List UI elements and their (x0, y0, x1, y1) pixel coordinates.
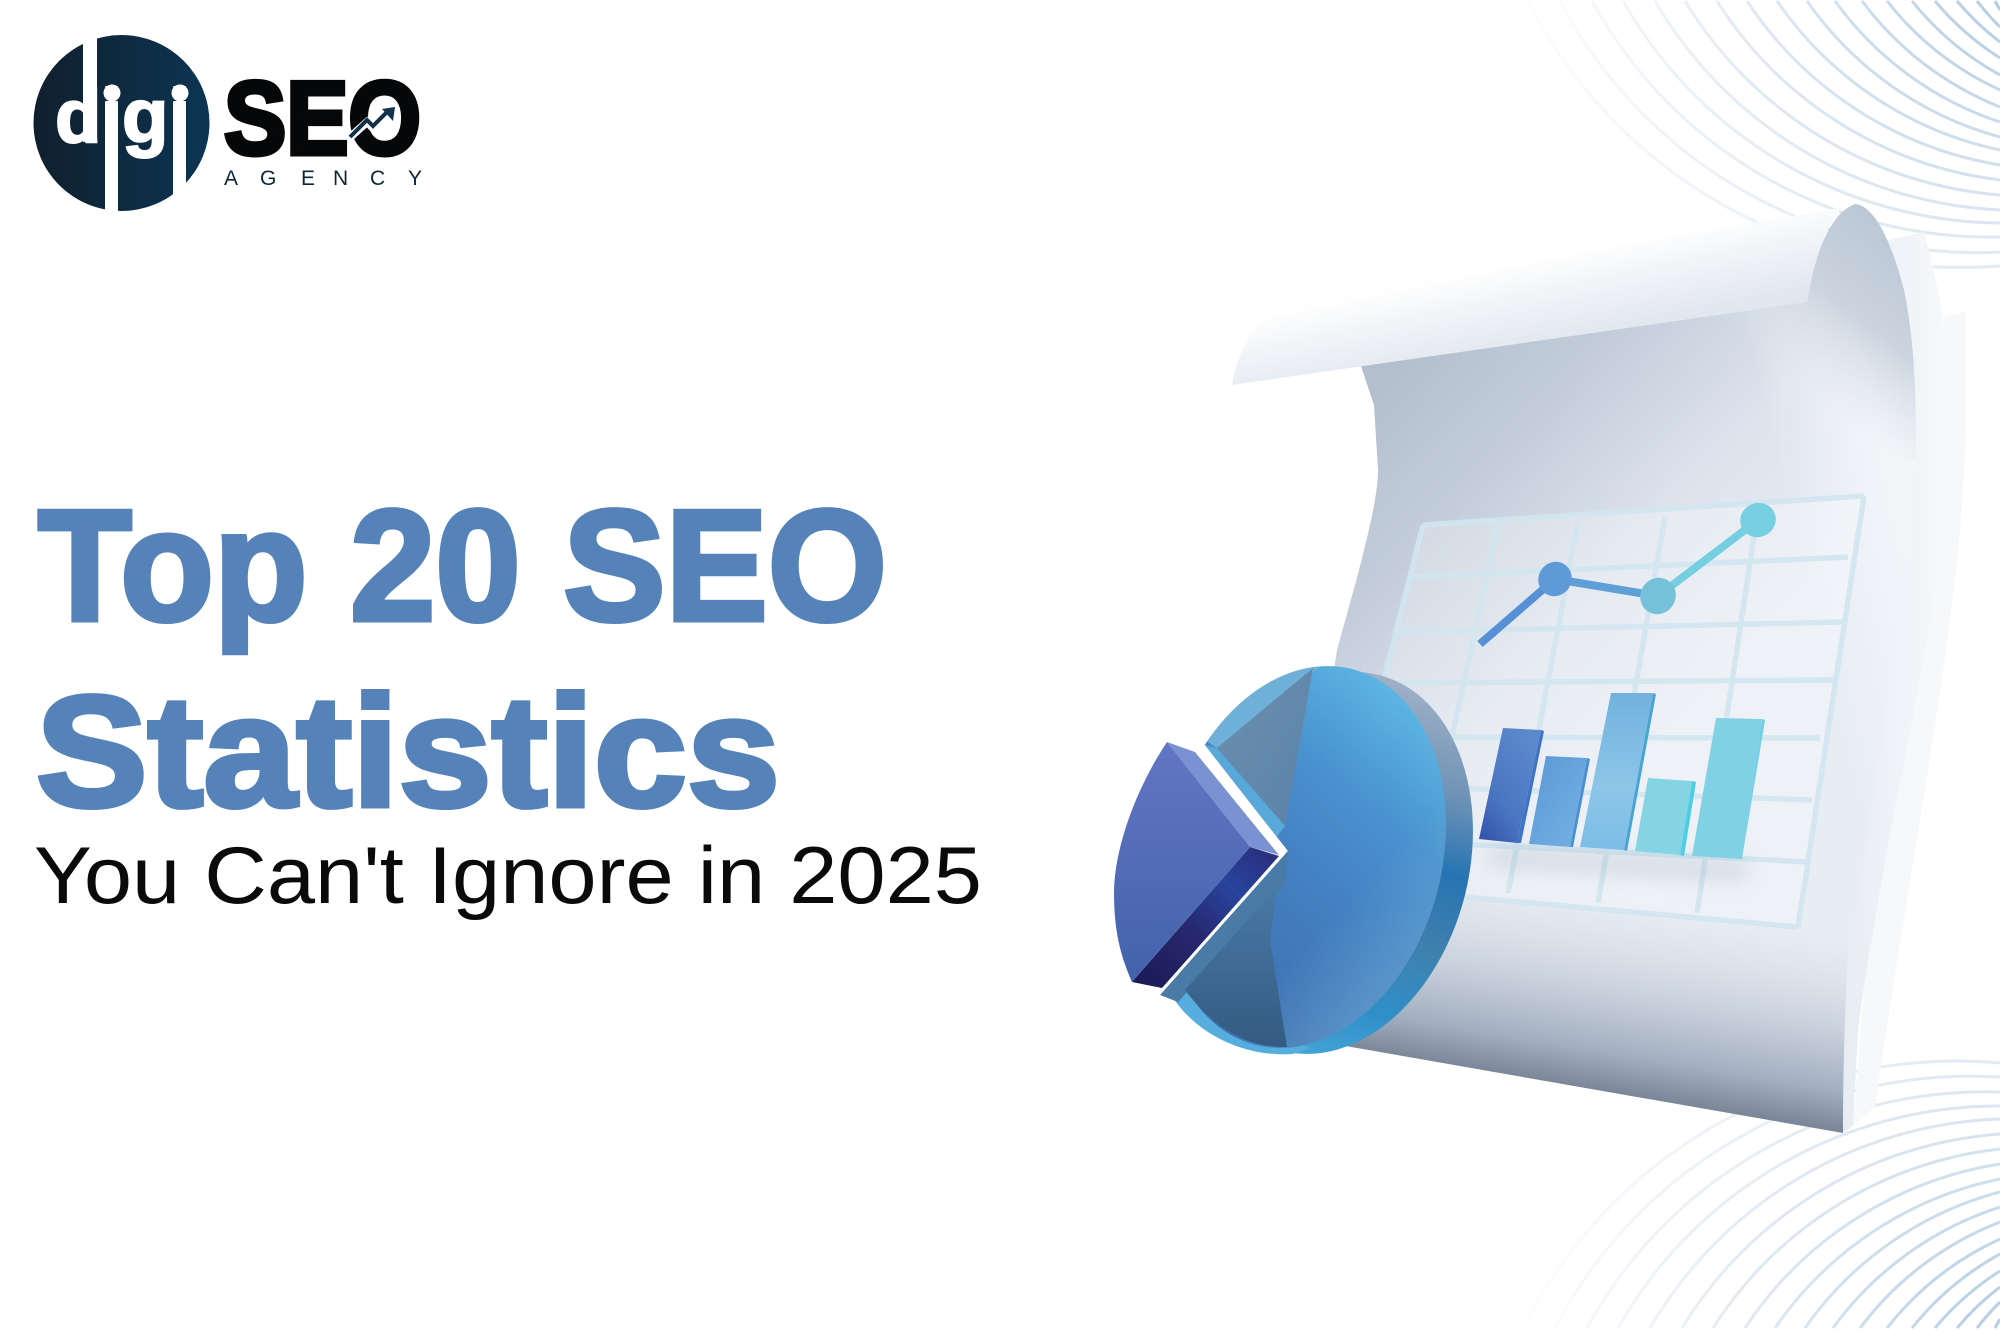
line chart (1480, 497, 1781, 644)
paper back layer near (1840, 232, 1950, 1133)
logo tagline: AGENCY: AGENCY (224, 167, 422, 190)
logo badge: digi: digi (55, 74, 190, 159)
logo badge: digi (34, 28, 210, 214)
pie separated slice (1114, 742, 1279, 988)
paper main sheet (1300, 204, 1916, 1133)
bar 3 (1580, 693, 1656, 851)
background concentric arcs: top right (1528, 1, 2000, 268)
background concentric arcs: bottom right (1523, 1061, 2000, 1328)
bar 1 (1479, 728, 1544, 843)
bar 2 (1529, 756, 1590, 847)
title line 1: Top 20 SEO (38, 478, 887, 654)
logo wordmark: SEO: SEO (224, 61, 421, 177)
logo (34, 28, 422, 214)
paper back layer far (1853, 312, 1966, 1125)
pie large disc (1160, 666, 1473, 1054)
bar 5 (1692, 718, 1765, 859)
bar chart (1479, 693, 1765, 880)
paper curled flap (1232, 206, 1844, 385)
icon: growth arrow (348, 107, 395, 139)
title (34, 478, 982, 921)
illustration: curled report paper (1232, 204, 1966, 1133)
title line 2: Statistics (36, 664, 780, 840)
illustration: 3D pie chart (1114, 666, 1473, 1054)
chart point 1 (1532, 556, 1578, 602)
bar 4 (1635, 778, 1696, 856)
chart grid on paper (1332, 496, 1864, 927)
chart point 3 (1735, 497, 1781, 543)
subtitle: You Can't Ignore in 2025 (34, 831, 982, 921)
chart point 2 (1634, 571, 1682, 621)
